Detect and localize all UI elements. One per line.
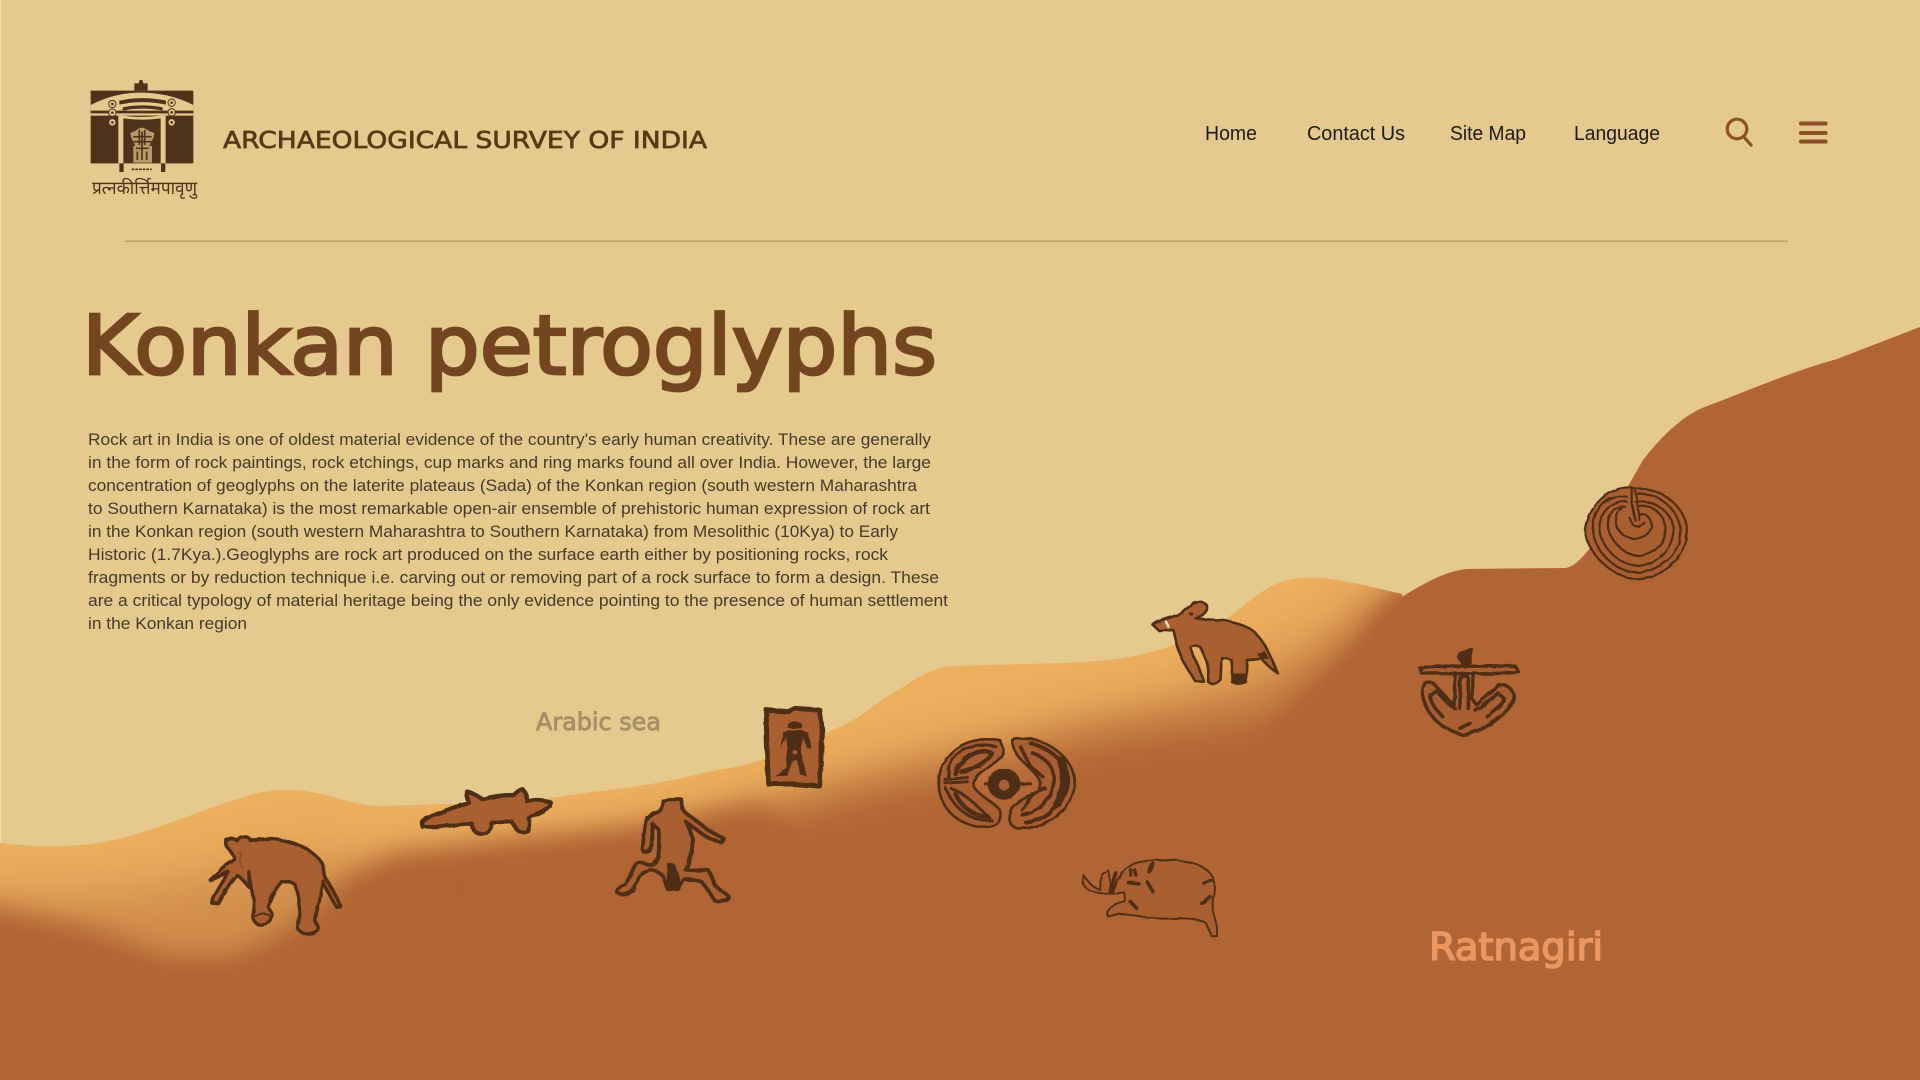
- description text: in the Konkan region: [88, 614, 247, 633]
- petroglyph: anchor figure: [1420, 648, 1518, 736]
- petroglyph: figure in frame: [766, 708, 822, 786]
- label: Arabic sea: Arabic sea: [536, 708, 661, 736]
- description text: are a critical typology of material heritage being the only evidence pointing to the presence of human settlement: [88, 591, 948, 610]
- description text: fragments or by reduction technique i.e. carving out or removing part of a rock surface to form a design. These: [88, 568, 939, 587]
- description text: in the form of rock paintings, rock etchings, cup marks and ring marks found all over India. However, the large: [88, 453, 931, 472]
- petroglyph: platypus: [422, 789, 551, 834]
- icon: search: [1727, 119, 1751, 145]
- navigation links: Site Map: [1450, 123, 1526, 145]
- logo: pillar feet: [119, 163, 165, 172]
- navigation links: Home: [1205, 123, 1257, 145]
- description text: in the Konkan region (south western Maharashtra to Southern Karnataka) from Mesolithic (10Kya) to Early: [88, 522, 899, 541]
- terrain: coastal hills: [0, 327, 1920, 1080]
- logo: gate block: [91, 91, 193, 163]
- organisation name: ARCHAEOLOGICAL SURVEY OF INDIA: [223, 126, 707, 154]
- description text: concentration of geoglyphs on the laterite plateaus (Sada) of the Konkan region (south western Maharashtra: [88, 476, 918, 495]
- description text: Rock art in India is one of oldest material evidence of the country's early human creativity. These are generally: [88, 430, 932, 449]
- petroglyph: double spiral disc: [939, 738, 1075, 828]
- navigation links: Language: [1574, 123, 1660, 145]
- petroglyph: labyrinth: [1585, 487, 1687, 579]
- label: Ratnagiri: Ratnagiri: [1429, 925, 1603, 969]
- petroglyph: rhinoceros: [1083, 860, 1217, 937]
- description text: to Southern Karnataka) is the most remarkable open-air ensemble of prehistoric human expression of rock art: [88, 499, 930, 518]
- logo: motto: प्रत्नकीर्त्तिमपावृणु: [92, 177, 198, 199]
- logo: Archaeological Survey of India emblem: [91, 80, 198, 199]
- solid lower ground: [0, 1059, 1440, 1080]
- description text: [88, 430, 948, 633]
- navigation links: Contact Us: [1307, 123, 1405, 145]
- description text: Historic (1.7Kya.).Geoglyphs are rock art produced on the surface earth either by positioning rocks, rock: [88, 545, 889, 564]
- petroglyph: human figure: [616, 799, 729, 901]
- icon: menu: [1799, 122, 1828, 144]
- dark laterite plateau: [1400, 327, 1920, 1080]
- header divider: [125, 240, 1788, 242]
- logo: national emblem: [131, 128, 154, 163]
- logo: rosettes: [109, 99, 175, 126]
- title: Konkan petroglyphs: [82, 299, 937, 394]
- petroglyph: deer: [1153, 602, 1277, 684]
- navigation links: [1205, 123, 1660, 145]
- orange foothill: [0, 578, 1440, 1080]
- petroglyph: elephant: [210, 837, 341, 934]
